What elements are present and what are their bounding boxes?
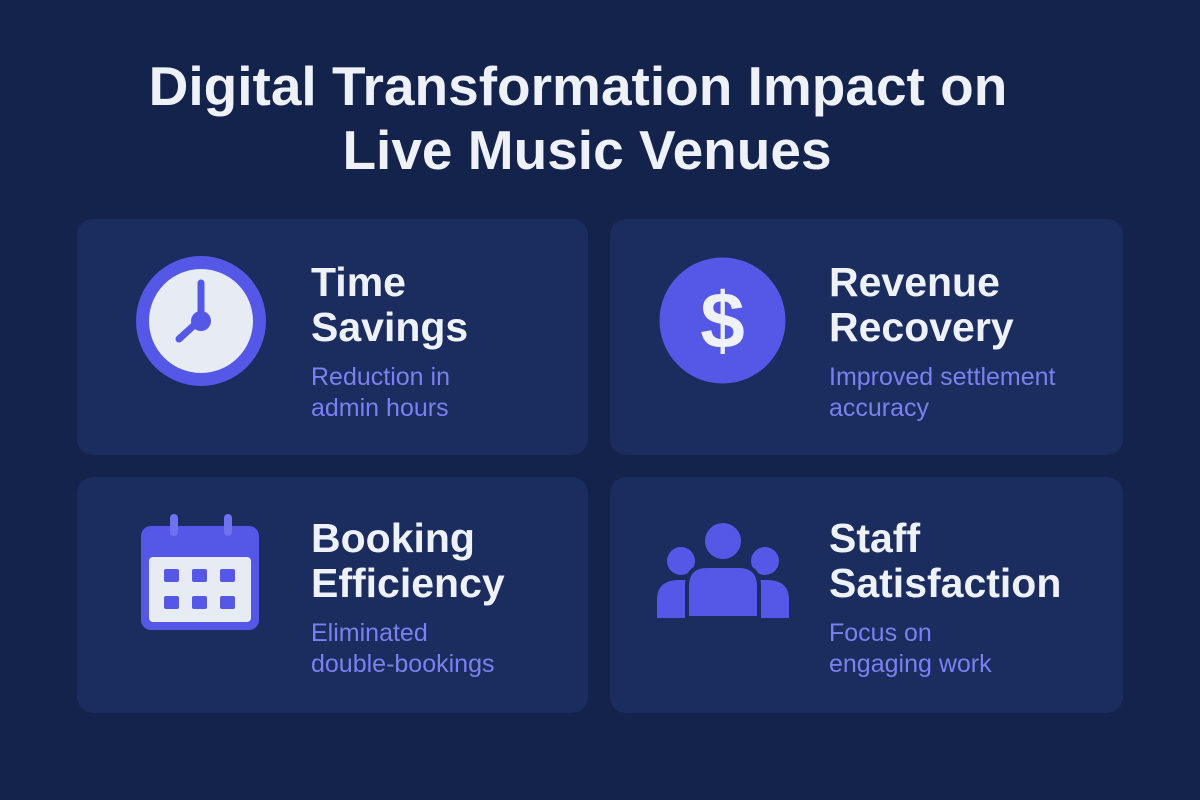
heading: Satisfaction bbox=[829, 560, 1061, 606]
heading bbox=[829, 259, 1014, 350]
subtext: accuracy bbox=[829, 394, 929, 422]
heading: Staff bbox=[829, 515, 920, 561]
subtext: engaging work bbox=[829, 650, 992, 678]
title: Digital Transformation Impact on bbox=[149, 55, 1007, 117]
subtext: admin hours bbox=[311, 394, 449, 422]
heading: Efficiency bbox=[311, 560, 505, 606]
panel: time savings bbox=[77, 219, 588, 455]
panel: revenue recovery bbox=[610, 219, 1123, 455]
icon: dollar: $ bbox=[700, 276, 745, 365]
heading: Savings bbox=[311, 304, 468, 350]
heading: Recovery bbox=[829, 304, 1014, 350]
heading: Time bbox=[311, 259, 406, 305]
title bbox=[149, 55, 1007, 181]
subtext: Improved settlement bbox=[829, 363, 1056, 391]
title: Live Music Venues bbox=[342, 119, 832, 181]
heading bbox=[311, 515, 505, 606]
panel: booking efficiency bbox=[77, 477, 588, 713]
heading bbox=[829, 515, 1061, 606]
subtext bbox=[311, 363, 450, 422]
subtext bbox=[829, 363, 1056, 422]
subtext: Focus on bbox=[829, 619, 932, 647]
icon: people bbox=[657, 523, 789, 618]
heading bbox=[311, 259, 468, 350]
subtext: Reduction in bbox=[311, 363, 450, 391]
icon: calendar bbox=[141, 514, 259, 630]
icon: clock bbox=[136, 256, 266, 386]
heading: Revenue bbox=[829, 259, 1000, 305]
subtext bbox=[311, 619, 494, 678]
subtext bbox=[829, 619, 992, 678]
subtext: Eliminated bbox=[311, 619, 428, 647]
heading: Booking bbox=[311, 515, 475, 561]
icon: dollar bbox=[660, 258, 786, 384]
panel: staff satisfaction bbox=[610, 477, 1123, 713]
subtext: double-bookings bbox=[311, 650, 494, 678]
